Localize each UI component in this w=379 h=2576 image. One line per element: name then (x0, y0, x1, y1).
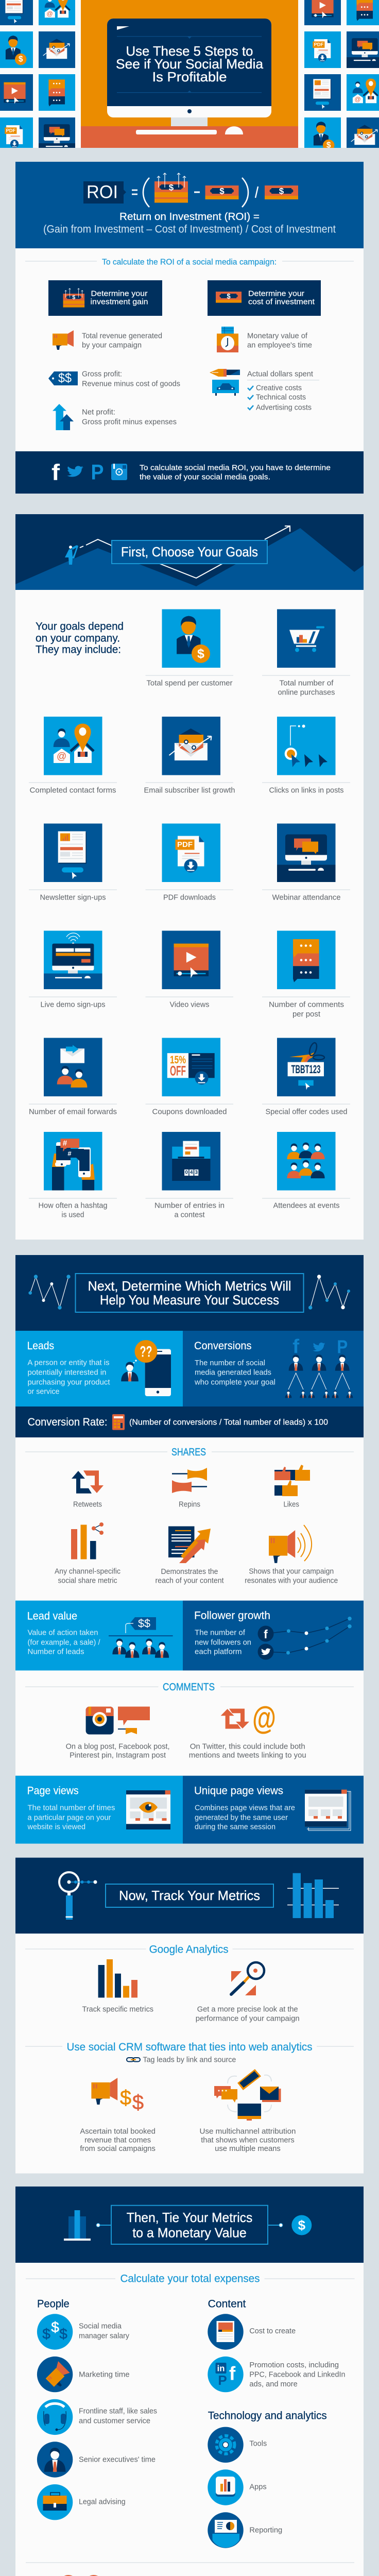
goal: email forwards (29, 1038, 117, 1116)
goal: live demo (40, 930, 105, 1009)
tag leads line with chain icon: Tag leads by link and source (143, 2056, 236, 2064)
panel: unique page views: Unique page views (194, 1785, 283, 1797)
page views text: website is viewed (27, 1823, 85, 1831)
page views text (27, 1803, 115, 1831)
goal dividers (29, 675, 350, 1198)
item: frontline staff: Frontline staff, like sales (79, 2407, 157, 2415)
item: salary: Social media (79, 2321, 122, 2331)
text: total revenue: by your campaign (82, 341, 142, 349)
icon: bars (64, 2210, 91, 2241)
goal: video views: Video views (170, 1001, 209, 1009)
icon: clock (217, 327, 238, 352)
icon: retweets (72, 1470, 104, 1494)
section title: Then, Tie Your Metrics (127, 2210, 252, 2225)
label: reach (156, 1567, 224, 1585)
unique page views text: generated by the same user (195, 1814, 288, 1822)
lead value text: Number of leads (28, 1648, 84, 1656)
heading: shares: SHARES (171, 1447, 206, 1458)
text: actual dollars spent: Creative costs (256, 383, 302, 393)
goal: comments: Number of comments (269, 1001, 344, 1009)
box: determine cost of investment: cost of investment (248, 298, 315, 306)
icon: pen (210, 369, 240, 377)
label: booked revenue: revenue that comes (84, 2136, 151, 2144)
main title: Use These 5 Steps to (126, 43, 253, 59)
icon: piggy bank (59, 2575, 103, 2576)
item: reporting (208, 2512, 282, 2548)
panel: track metrics header (15, 1858, 364, 1934)
section title (111, 2206, 268, 2244)
lead value text: (for example, a sale) / (28, 1638, 100, 1647)
box: determine investment gain: investment gain (91, 298, 148, 306)
panel: lead value: Lead value (27, 1611, 77, 1622)
icon: magnifier with target (231, 1962, 264, 1995)
text: actual dollars spent: Technical costs (256, 393, 306, 402)
goal: online purchases (277, 609, 336, 697)
goal: video views (162, 930, 220, 1009)
label: blog comments: On a blog post, Facebook post, (66, 1742, 170, 1751)
formula in words: (Gain from Investment – Cost of Investment) / Cost of Investment (43, 224, 336, 235)
label: multichannel attribution: use multiple means (215, 2144, 281, 2153)
goal: offer codes (266, 1038, 347, 1116)
item: legal advising (37, 2484, 126, 2520)
text: employee time: an employee's time (247, 341, 312, 349)
item: salary: $ (42, 2326, 50, 2342)
label: twitter comments: On Twitter, this could include both (190, 1742, 305, 1751)
text: net profit: Net profit: (82, 408, 115, 416)
left zigzag chart (28, 1275, 71, 1310)
panel: total expenses (15, 2263, 364, 2576)
label: precise look: Get a more precise look at the (197, 2005, 298, 2013)
icon: bar chart (287, 1873, 339, 1918)
icon: phone with question: ?? (140, 1344, 152, 1360)
heading: To calculate the ROI of a social media campaign: (102, 258, 277, 267)
box: determine cost of investment (208, 280, 321, 316)
goal: newsletter: Newsletter sign-ups (40, 893, 106, 902)
intro text: on your company. (36, 633, 120, 644)
text: net profit (82, 408, 177, 427)
label: precise look (196, 2005, 300, 2023)
follower growth text: The number of (195, 1628, 246, 1637)
formula symbols (132, 178, 258, 207)
icon: up arrows (53, 404, 74, 430)
goal: email subscriber growth (144, 717, 235, 794)
callout text (140, 464, 331, 481)
goal: PDF downloads (162, 823, 220, 902)
label: channel specific: social share metric (58, 1577, 117, 1585)
panel: leads (15, 1331, 183, 1406)
section title: Next, Determine Which Metrics Will (88, 1278, 291, 1294)
right zigzag chart (308, 1275, 350, 1310)
panel: leads: Leads (27, 1340, 54, 1352)
text: actual dollars spent: Advertising costs (256, 403, 312, 412)
goal: clicks on links (269, 717, 344, 794)
goal: coupons (152, 1038, 227, 1116)
icon: mentions (221, 1700, 276, 1736)
icon: reach document with arrows (168, 1526, 211, 1563)
item: frontline staff: and customer service (79, 2416, 150, 2426)
panel: how to calculate ROI (15, 248, 364, 451)
icon: megaphone with dollars: $ (132, 2091, 144, 2114)
item: marketing time: Marketing time (79, 2370, 130, 2379)
icon: repins (172, 1468, 207, 1493)
panel: conversions (183, 1331, 364, 1406)
leads description (28, 1358, 110, 1396)
goal: hashtag (38, 1132, 107, 1219)
panel: monetary value header (15, 2187, 364, 2263)
ROI label (83, 181, 126, 204)
item: frontline staff (37, 2399, 157, 2435)
icon: priced leads: $$ (138, 1617, 150, 1630)
label: reach: reach of your content (156, 1577, 224, 1585)
panel: conversion rate band: (Number of conversions / Total number of leads) x 100 (129, 1418, 328, 1427)
panel: First, choose your goals header (15, 514, 364, 590)
label: retweets: Retweets (73, 1500, 102, 1509)
callout text: the value of your social media goals. (140, 473, 270, 481)
goal: clicks on links: Clicks on links in posts (269, 786, 344, 794)
heading: calculate expenses: Calculate your total expenses (120, 2273, 260, 2284)
goal: live demo: Live demo sign-ups (40, 1001, 105, 1009)
panel: conversion rate band (15, 1406, 364, 1437)
label: repins: Repins (179, 1500, 200, 1509)
panel: page views: Page views (27, 1785, 79, 1797)
heading: people: People (37, 2298, 70, 2310)
follower growth text: new followers on (195, 1638, 251, 1647)
main title: Is Profitable (152, 69, 227, 84)
item: cost to create: Cost to create (249, 2327, 296, 2335)
label: twitter comments (189, 1742, 306, 1760)
conversions description: media generated leads (195, 1368, 271, 1377)
icon: social referral trees (285, 1336, 353, 1398)
item: reporting: Reporting (249, 2526, 282, 2535)
connector left (96, 2224, 111, 2227)
icon: price tag: $$ (58, 371, 72, 385)
item: apps: Apps (249, 2482, 267, 2492)
main title (116, 43, 264, 84)
section title: to a Monetary Value (132, 2225, 247, 2240)
icon: priced leads (109, 1617, 173, 1658)
goal: newsletter (40, 823, 106, 902)
conversions description (194, 1359, 275, 1387)
item: promotion costs: in (217, 2364, 225, 2373)
goal: total spend per customer: Total spend per customer (146, 679, 233, 687)
icon: social media row: P (91, 460, 104, 484)
item: cost to create (208, 2314, 296, 2350)
panel: lead value (15, 1601, 183, 1670)
label: blog comments: Pinterest pin, Instagram post (70, 1751, 166, 1760)
goal: online purchases: online purchases (278, 688, 335, 697)
heading: social CRM: Use social CRM software that ties into web analytics (67, 2041, 312, 2053)
label: resonates: resonates with your audience (245, 1577, 338, 1585)
section title: Now, Track Your Metrics (119, 1888, 260, 1903)
item: salary (37, 2314, 129, 2350)
icon: person with telescope (65, 545, 78, 565)
goal: events: Attendees at events (273, 1201, 340, 1210)
icon: calculator (112, 1414, 125, 1430)
item: promotion costs: PPC, Facebook and LinkedIn (249, 2370, 345, 2379)
goal: email subscriber growth: Email subscriber list growth (144, 786, 235, 794)
goal: contact forms: Completed contact forms (30, 786, 116, 794)
goal: contest: a contest (174, 1211, 205, 1219)
lead value text (28, 1628, 100, 1656)
panel: follower growth: Follower growth (194, 1609, 270, 1622)
label: resonates: Shows that your campaign (249, 1567, 334, 1575)
item: promotion costs: P (218, 2372, 227, 2388)
panel: tracking tools (15, 1934, 364, 2173)
label: blog comments (66, 1742, 170, 1760)
icon: phone with question (121, 1340, 171, 1396)
chart line with arrow (80, 526, 290, 578)
goal: contest: Number of entries in (154, 1201, 225, 1210)
icon: gain bill with arrows (154, 173, 188, 203)
goal: hashtag: How often a hashtag (38, 1201, 107, 1210)
icon: browser with eye (126, 1790, 170, 1829)
item: promotion costs: Promotion costs, including (249, 2361, 339, 2369)
connector right (268, 2224, 283, 2227)
leads description: A person or entity that is (28, 1358, 109, 1367)
text: gross profit: Gross profit: (82, 370, 122, 378)
goal: hashtag: is used (62, 1211, 84, 1219)
lead value text: Value of action taken (28, 1628, 98, 1637)
icon: cost bill (205, 185, 239, 199)
panel: page views (15, 1776, 183, 1843)
goal: total spend per customer (146, 609, 233, 687)
icon: social referral trees: P (337, 1336, 348, 1357)
item: apps (208, 2469, 267, 2505)
goal: email forwards: Number of email forwards (29, 1108, 117, 1116)
goal: contact forms (30, 717, 116, 794)
icon: multichannel devices (214, 2069, 281, 2121)
item: senior executives: Senior executives' time (79, 2455, 156, 2464)
formula in words (43, 211, 336, 235)
mountains (15, 528, 364, 590)
label: track specific metrics: Track specific metrics (82, 2005, 153, 2013)
icon: instagram comments (86, 1706, 150, 1734)
monitor illustration (107, 19, 271, 134)
icon: car billboard (212, 380, 239, 396)
text: employee time (247, 332, 312, 349)
icon: analytics bars (98, 1959, 137, 1997)
item: legal advising: Legal advising (79, 2498, 126, 2506)
label: likes: Likes (283, 1500, 299, 1509)
icon: social media row (51, 460, 127, 485)
panel: ROI formula (15, 162, 364, 248)
item: senior executives (37, 2442, 156, 2478)
unique page views text (195, 1803, 295, 1831)
label: booked revenue (80, 2127, 156, 2153)
item: salary: $ (59, 2326, 67, 2342)
label: multichannel attribution: Use multichannel attribution (200, 2127, 296, 2136)
follower line chart: f (264, 1628, 268, 1641)
formula in words: Return on Investment (ROI) = (119, 211, 260, 223)
goal: webinar (272, 823, 341, 902)
icon: share metric bars (71, 1522, 104, 1559)
box: determine cost of investment: Determine your (248, 290, 304, 298)
page views text: The total number of times (28, 1803, 115, 1812)
text: employee time: Monetary value of (247, 332, 308, 340)
text: total revenue: Total revenue generated (82, 332, 162, 340)
item: salary: $ (51, 2319, 59, 2335)
panel: conversions: Conversions (194, 1340, 252, 1352)
panel: goal list (15, 590, 364, 1240)
icon: magnifying glass (59, 1872, 97, 1920)
goal: offer codes: Special offer codes used (266, 1108, 347, 1116)
section title (112, 540, 267, 564)
follower growth text: each platform (195, 1648, 242, 1656)
text: actual dollars spent (247, 370, 319, 412)
leads description: purchasing your product (28, 1378, 110, 1387)
panel: unique page views (183, 1776, 364, 1843)
text: gross profit (82, 370, 180, 388)
item: marketing time (37, 2357, 130, 2392)
icon: dollar coin: $ (298, 2217, 306, 2233)
box: determine investment gain (48, 280, 162, 316)
hero orange backdrop and desk (81, 0, 298, 148)
icon: mentions: @ (252, 1700, 276, 1736)
item: salary: manager salary (79, 2332, 129, 2340)
goal: comments (269, 930, 344, 1019)
goal: comments: per post (292, 1010, 321, 1019)
page views text: a particular page on your (28, 1814, 111, 1822)
text: gross profit: Revenue minus cost of goods (82, 379, 180, 388)
heading: content: Content (208, 2298, 246, 2310)
heading: google analytics: Google Analytics (149, 1943, 229, 1956)
hero banner (0, 0, 379, 154)
text: net profit: Gross profit minus expenses (82, 417, 177, 427)
icon: megaphone with dollars (91, 2078, 144, 2114)
icon: cost bill (265, 185, 298, 199)
unique page views text: during the same session (195, 1823, 275, 1831)
item: tools: Tools (249, 2439, 267, 2448)
intro text: They may include: (36, 644, 121, 655)
icon: likes (274, 1465, 310, 1496)
section title (75, 1274, 304, 1312)
goal: coupons: Coupons downloaded (152, 1108, 227, 1116)
section title: First, Choose Your Goals (121, 544, 258, 560)
label: resonates (245, 1567, 338, 1585)
follower line chart (257, 1617, 352, 1660)
icon: social media row: f (51, 460, 60, 485)
label: precise look: performance of your campaign (196, 2014, 300, 2023)
intro text (36, 620, 124, 655)
label: multichannel attribution (200, 2127, 296, 2153)
section title: Help You Measure Your Success (100, 1292, 279, 1308)
panel: shares and comments (15, 1437, 364, 1775)
follower growth text (195, 1628, 251, 1656)
callout text: To calculate social media ROI, you have to determine (140, 464, 331, 472)
conversions description: who complete your goal (194, 1378, 275, 1387)
label: booked revenue: from social campaigns (80, 2144, 156, 2153)
label: channel specific (55, 1567, 120, 1585)
item: promotion costs: ads, and more (249, 2380, 298, 2388)
conversions description: The number of social (195, 1359, 265, 1367)
section title (106, 1884, 273, 1907)
icon: megaphone (53, 330, 74, 350)
icon: stacked browsers (305, 1790, 351, 1831)
label: booked revenue: Ascertain total booked (80, 2127, 156, 2136)
text: total revenue (82, 332, 162, 349)
goal: webinar: Webinar attendance (272, 893, 341, 902)
box: determine investment gain: Determine your (91, 290, 147, 298)
goal: PDF downloads: PDF downloads (163, 893, 216, 902)
icon: price tag (48, 371, 78, 385)
panel: follower growth (183, 1601, 364, 1670)
heading: technology and analytics: Technology and analytics (208, 2410, 327, 2421)
label: multichannel attribution: that shows when customers (201, 2136, 295, 2144)
goal: contest (154, 1132, 225, 1219)
item: tools (208, 2427, 267, 2463)
ROI label: ROI (87, 182, 118, 202)
goal: events (273, 1132, 340, 1210)
text: actual dollars spent: Actual dollars spent (247, 370, 314, 378)
label: reach: Demonstrates the (161, 1567, 218, 1576)
leads description: potentially interested in (28, 1368, 106, 1377)
goal: online purchases: Total number of (279, 679, 334, 687)
leads description: or service (28, 1387, 60, 1396)
icon: dollar coin (291, 2215, 312, 2235)
panel: conversion rate band: Conversion Rate: (28, 1416, 107, 1428)
unique page views text: Combines page views that are (195, 1803, 295, 1812)
icon: loud megaphone (269, 1525, 312, 1563)
main title: See if Your Social Media (116, 56, 264, 72)
icon: social referral trees: f (292, 1336, 299, 1358)
panel: social media value callout (15, 451, 364, 494)
heading: comments: COMMENTS (163, 1682, 215, 1693)
label: channel specific: Any channel-specific (55, 1567, 120, 1575)
panel: metrics header (15, 1255, 364, 1331)
hero icon tile mosaic (0, 0, 379, 154)
item: promotion costs: f (229, 2363, 236, 2384)
icon: megaphone with dollars: $ (120, 2087, 131, 2109)
intro text: Your goals depend (36, 620, 124, 633)
item: promotion costs (208, 2357, 345, 2392)
label: twitter comments: mentions and tweets linking to you (189, 1751, 306, 1760)
